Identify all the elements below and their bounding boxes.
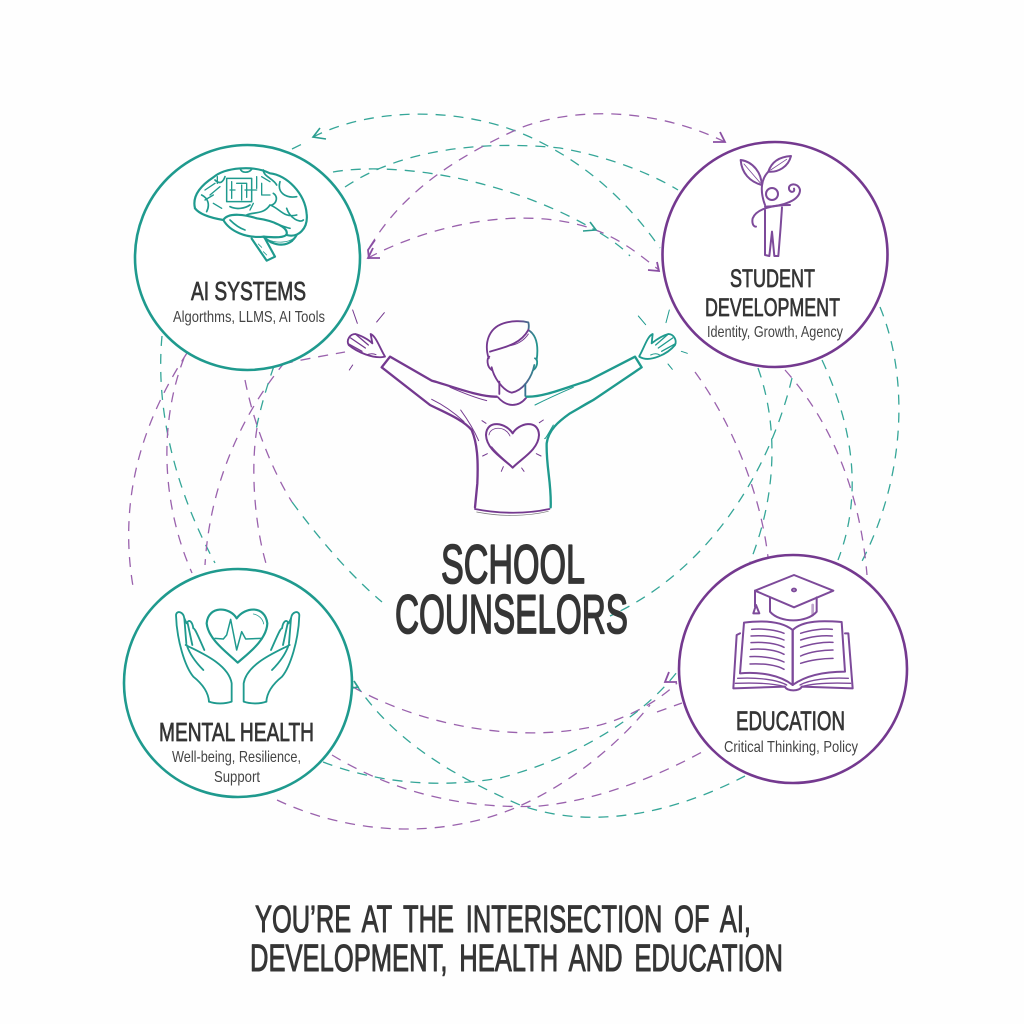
- icon: open book and graduation cap: [733, 575, 853, 690]
- title: COUNSELORS: [395, 583, 628, 645]
- icon: sprouting figure: [741, 156, 800, 256]
- dashed connection arcs: [129, 114, 899, 829]
- arrowheads: [313, 128, 725, 688]
- left arm and torso: [348, 334, 497, 507]
- node: student development: [662, 142, 888, 367]
- hand rays: [349, 310, 687, 370]
- right arm and torso: [527, 334, 676, 507]
- title: SCHOOL: [441, 533, 585, 595]
- icon: hands holding heart: [176, 610, 299, 703]
- node: student development: Identity, Growth, Agency: [707, 324, 843, 341]
- arcs: top: [292, 114, 725, 270]
- icon: brain with circuit chip: [194, 168, 307, 261]
- closing statement: YOU’RE AT THE INTERISECTION OF AI,: [255, 899, 751, 941]
- heart on chest: [482, 420, 543, 471]
- arcs: left: [129, 336, 382, 602]
- closing statement: [250, 899, 783, 980]
- node: mental health: MENTAL HEALTH: [159, 717, 314, 747]
- node: student development: DEVELOPMENT: [705, 294, 840, 322]
- shirt hem: [475, 509, 549, 513]
- node: student development: STUDENT: [730, 265, 815, 293]
- node: mental health: [124, 569, 352, 797]
- arcs: bottom: [277, 672, 745, 829]
- node: education: [679, 555, 907, 783]
- node: mental health: Well-being, Resilience,: [172, 749, 301, 766]
- node: mental health: Support: [214, 769, 260, 786]
- node: AI systems: [135, 145, 360, 370]
- node: education: EDUCATION: [736, 706, 845, 736]
- title: [395, 533, 628, 645]
- head: [487, 321, 537, 405]
- node: AI systems: Algorthms, LLMS, AI Tools: [173, 309, 325, 326]
- arcs: right: [610, 307, 899, 616]
- central figure: school counselor with open arms: [348, 310, 687, 515]
- node: AI systems: AI SYSTEMS: [191, 276, 306, 306]
- closing statement: DEVELOPMENT, HEALTH AND EDUCATION: [250, 938, 783, 980]
- node: education: Critical Thinking, Policy: [724, 739, 858, 756]
